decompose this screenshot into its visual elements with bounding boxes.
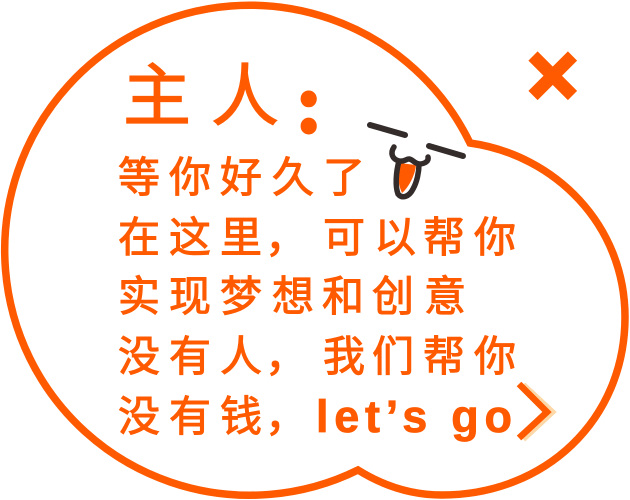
title: 主人 <box>123 59 279 135</box>
line 2: 在这里，可以帮你 <box>118 214 516 261</box>
cute face icon <box>370 125 463 197</box>
line 1: 等你好久了 <box>118 154 365 201</box>
line 4: 没有人，我们帮你 <box>118 333 516 380</box>
message text <box>118 154 516 442</box>
line 5: 没有钱， <box>118 393 307 440</box>
let's go: let’s go <box>316 391 512 442</box>
arrow <box>519 384 552 439</box>
title <box>123 48 320 153</box>
title: : <box>297 48 320 153</box>
close icon <box>533 56 572 96</box>
line 3: 实现梦想和创意 <box>118 273 466 320</box>
